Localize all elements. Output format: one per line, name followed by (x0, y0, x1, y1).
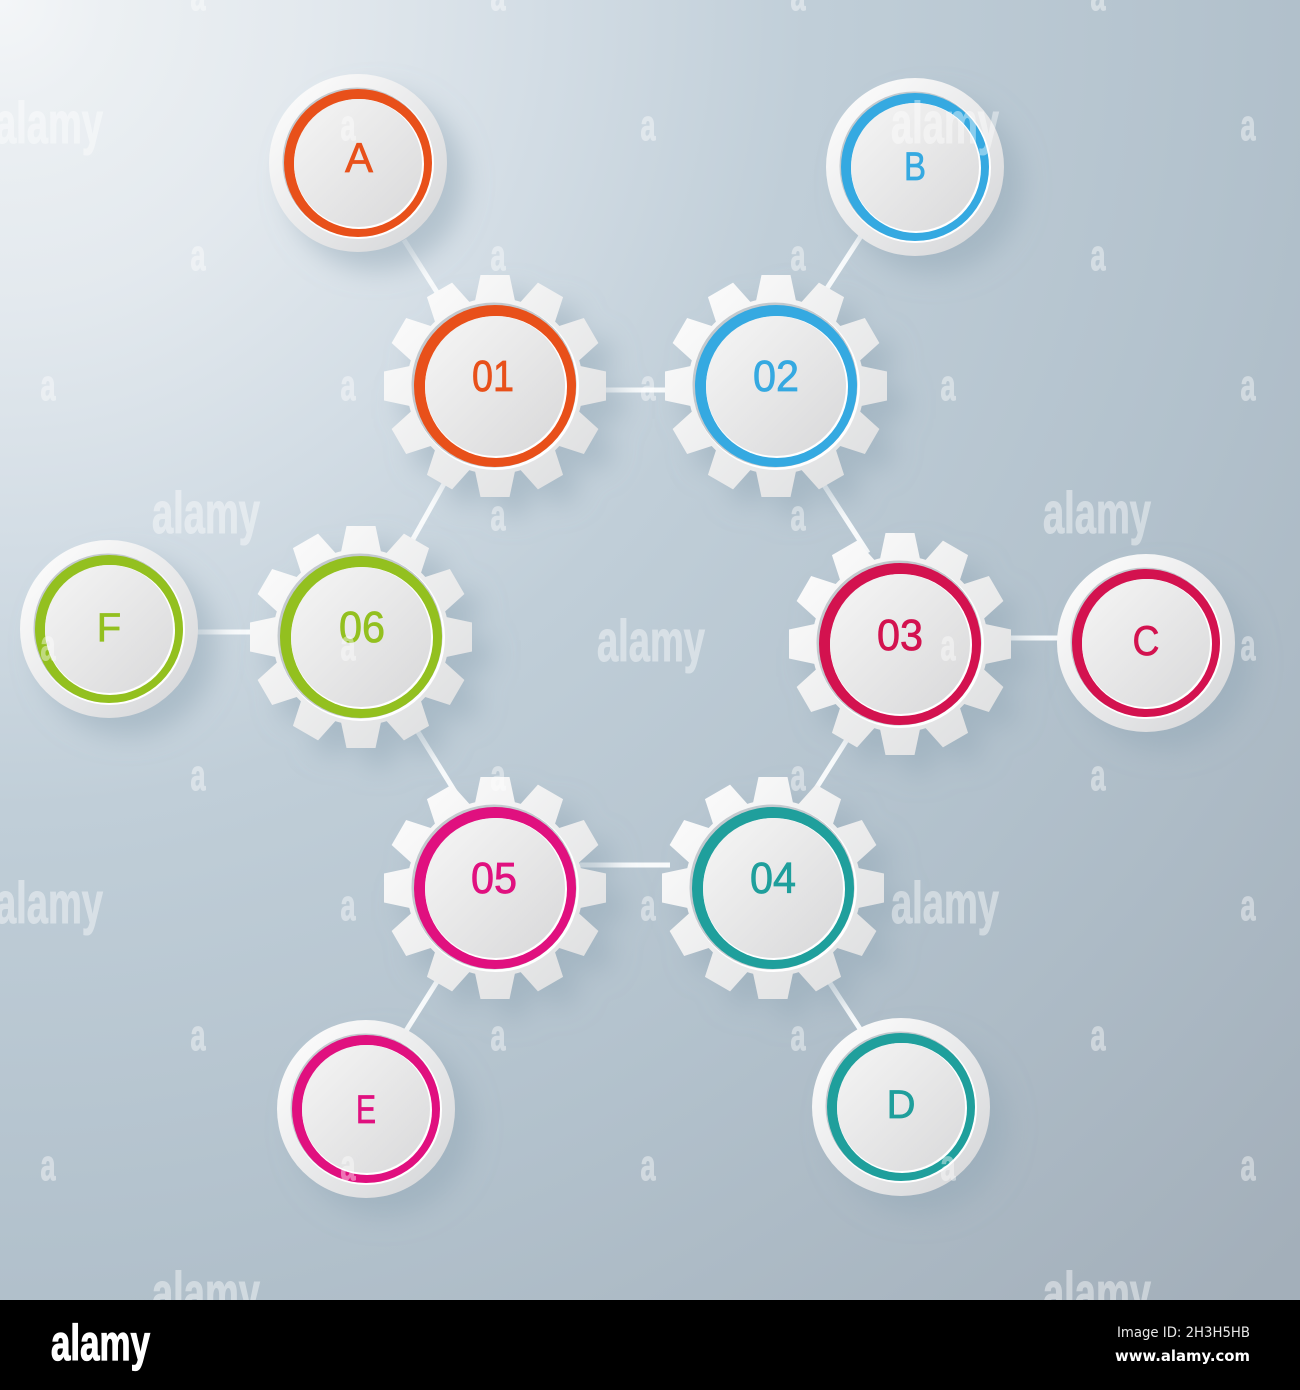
circle C (1057, 554, 1235, 732)
footer bar (0, 1300, 1300, 1390)
watermarks: a (190, 751, 206, 800)
gear 03: 03 (877, 611, 923, 660)
gear 06 (246, 522, 476, 752)
watermarks: a (490, 751, 506, 800)
watermarks: a (790, 231, 806, 280)
watermarks: a (1240, 101, 1256, 150)
circle F (20, 540, 198, 718)
watermarks: a (640, 881, 656, 930)
watermarks: a (340, 621, 356, 670)
image id: Image ID: 2H3H5HB (1117, 1325, 1250, 1341)
watermarks: a (790, 751, 806, 800)
circle B: B (904, 145, 926, 189)
watermarks: a (640, 101, 656, 150)
gear 01 (380, 271, 610, 501)
watermarks: a (490, 491, 506, 540)
watermarks: a (940, 1141, 956, 1190)
gear 04 (658, 773, 888, 1003)
gear 05 (380, 773, 610, 1003)
watermarks: a (790, 1011, 806, 1060)
watermarks: a (1090, 1011, 1106, 1060)
watermarks: a (40, 621, 56, 670)
watermarks: alamy (152, 481, 260, 546)
circle D (812, 1018, 990, 1196)
watermarks: alamy (152, 1261, 260, 1326)
watermarks: a (490, 1011, 506, 1060)
watermarks: alamy (1043, 1261, 1151, 1326)
watermarks: a (1240, 361, 1256, 410)
gear 02: 02 (753, 352, 799, 401)
watermarks: a (1240, 621, 1256, 670)
watermarks: a (340, 361, 356, 410)
circle A (269, 74, 447, 252)
watermarks: a (340, 1141, 356, 1190)
circle E: E (356, 1088, 376, 1132)
watermarks: a (340, 101, 356, 150)
circle C: C (1132, 617, 1160, 664)
connector lines (196, 236, 1062, 1034)
gear 04: 04 (750, 854, 796, 903)
footer logo: alamy (51, 1315, 150, 1371)
watermarks: a (640, 1141, 656, 1190)
gear 05: 05 (471, 854, 517, 903)
gear 02 (661, 271, 891, 501)
watermarks: a (640, 361, 656, 410)
watermarks: a (940, 361, 956, 410)
circle D: D (887, 1083, 915, 1127)
watermarks: a (940, 621, 956, 670)
circle A: A (345, 134, 373, 181)
watermarks: a (190, 1011, 206, 1060)
watermarks: a (340, 881, 356, 930)
watermarks: alamy (597, 609, 705, 674)
watermarks: a (1090, 231, 1106, 280)
watermarks: alamy (1043, 481, 1151, 546)
circle E (277, 1020, 455, 1198)
watermarks: a (1090, 751, 1106, 800)
website: www.alamy.com (1115, 1347, 1250, 1365)
watermarks: a (40, 1141, 56, 1190)
circle F: F (97, 606, 121, 650)
watermarks: alamy (891, 871, 999, 936)
circle B (826, 78, 1004, 256)
gear 01: 01 (472, 352, 514, 401)
gear 03 (785, 529, 1015, 759)
watermarks: a (1240, 1141, 1256, 1190)
watermarks: a (790, 491, 806, 540)
gear 06: 06 (339, 603, 385, 652)
watermarks: alamy (891, 91, 999, 156)
watermarks: a (40, 361, 56, 410)
watermarks: a (1240, 881, 1256, 930)
watermarks: a (490, 231, 506, 280)
watermarks: a (190, 231, 206, 280)
